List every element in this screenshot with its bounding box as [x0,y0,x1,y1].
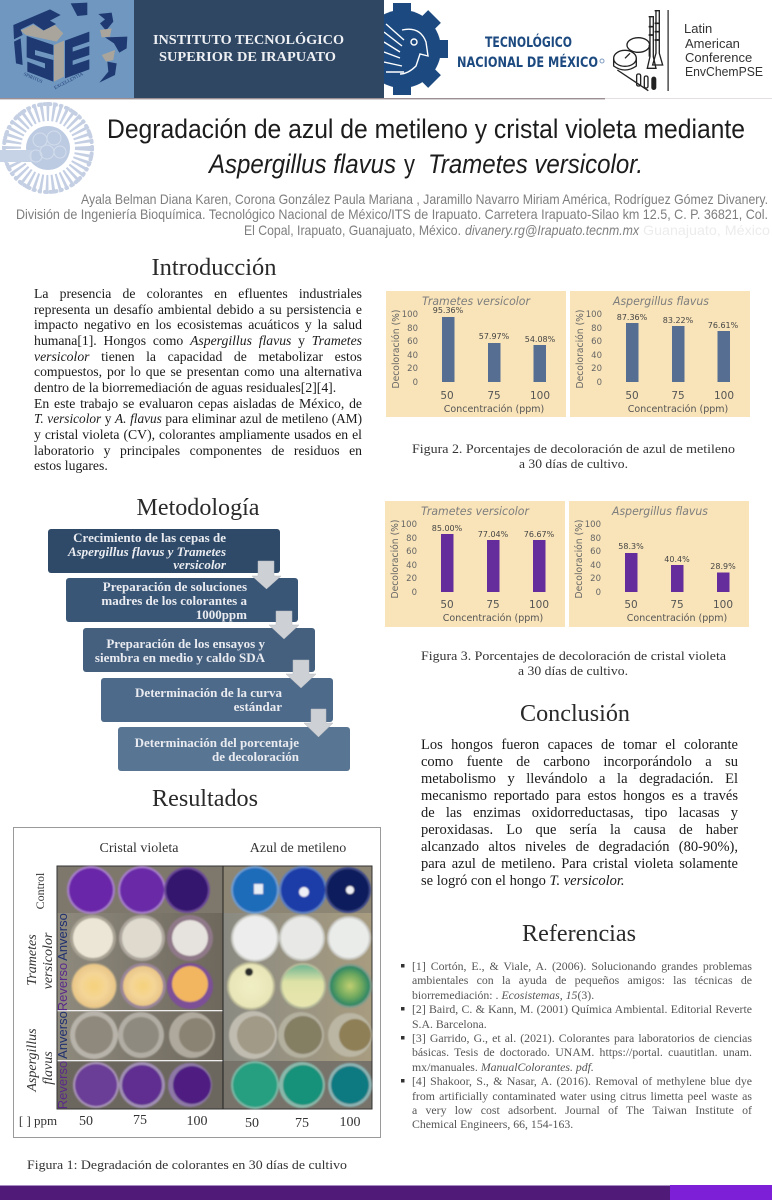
row labels: Aspergillus [25,1028,40,1093]
chart: methylene blue, Aspergillus flavus: 80 [591,324,602,334]
chart: methylene blue, Trametes versicolor: 57.97% [479,332,510,341]
step 4: Determinación de la curva [135,685,282,700]
icon: ISIE cube logo: SPIRITUS [23,72,43,85]
step 5 [118,727,350,771]
chart: methylene blue, Trametes versicolor: 54.08% [525,335,556,344]
chart: methylene blue, Trametes versicolor: 60 [407,337,418,347]
chart: crystal violet, Trametes versicolor: 85.00% [432,524,463,533]
step 3: siembra en medio y caldo SDA [95,650,266,665]
header: Tecnológico Nacional de México wordmark: TECNOLÓGICO [485,33,572,51]
step 1: Crecimiento de las cepas de [73,530,226,545]
header: institute name panel [134,0,384,98]
text block: introduction: estos lugares. [34,458,108,473]
chart: methylene blue, Trametes versicolor: Decoloración (%) [390,309,402,388]
step 3: Preparación de los ensayos y [106,636,265,651]
text block: references: Chemical Engineers, 66, 154-163. [412,1117,573,1131]
authors and affiliation: divanery.rg@Irapuato.tecnm.mx [465,222,640,238]
chart: crystal violet, Aspergillus flavus: Aspergillus flavus [611,504,708,518]
chart: methylene blue, Aspergillus flavus [570,291,750,417]
text block: conclusion [421,737,738,889]
chart: methylene blue, Trametes versicolor: 0 [413,378,418,388]
chart: methylene blue, Aspergillus flavus: 75 [671,390,685,402]
text block: introduction: representa un desafío ambiental debido a su persistencia e [34,302,362,317]
row: Trametes obverse plates [70,914,371,962]
chart: methylene blue, Aspergillus flavus: Aspergillus flavus [612,294,709,308]
row labels: flavus [41,1051,56,1085]
row labels: Anverso [55,913,70,961]
row labels: Reverso [55,963,70,1011]
concentration axis: 75 [133,1113,147,1128]
chart: methylene blue, Trametes versicolor: 80 [407,324,418,334]
step 4 [101,678,333,722]
caption: figure 3 [421,648,726,678]
header: conference name: Latin [684,21,712,36]
figure 1: culture plates photo: Azul de metileno [250,841,346,856]
text block: references: ambientales con la ayuda de pequeños amigos: las técnicas de [412,973,752,987]
concentration axis: 100 [186,1114,208,1129]
figure 1: culture plates photo: Cristal violeta [100,841,179,856]
chart: methylene blue, Aspergillus flavus: Decoloración (%) [574,309,586,388]
text block: conclusion: peroxidasas. Lo que sería la causa de haber [421,822,738,838]
caption: figure 1: Figura 1: Degradación de colorantes en 30 días de cultivo [27,1157,347,1172]
arrow 2 [269,611,299,639]
chart: crystal violet, Aspergillus flavus: 80 [590,534,601,544]
header: conference name [684,21,763,79]
text block: introduction: laboratorio y principales componentes de residuos en [34,443,362,458]
text block: conclusion: como fuente de carbono incorporándolo a su [421,754,738,770]
step 2: Preparación de soluciones [103,579,247,594]
title: Degradación de azul de metileno y cristal violeta mediante [107,114,745,144]
concentration axis: [ ] ppm [19,1113,57,1128]
header: conference name: American [685,36,740,51]
caption: figure 2 [412,441,735,471]
title: Aspergillus flavus [207,149,396,179]
row labels: Reverso [55,1061,70,1109]
heading: Conclusión: Conclusión [520,701,630,727]
chart: methylene blue, Trametes versicolor [386,291,566,417]
header rule [0,98,772,99]
text block: introduction: La presencia de colorantes en efluentes industriales [34,286,362,301]
row: control plates [67,866,371,914]
chart: crystal violet, Aspergillus flavus: 100 [585,520,601,530]
icon: ISIE cube logo: EXCELLENTIA [54,72,85,91]
header: Tecnológico Nacional de México wordmark [457,33,604,71]
chart: crystal violet, Trametes versicolor: 50 [440,599,454,611]
chart: crystal violet, Trametes versicolor: Concentración (ppm) [443,613,543,624]
chart: crystal violet, Trametes versicolor: 100 [401,520,417,530]
text block: introduction: humana[1]. Hongos como Aspergillus flavus y Trametes [34,333,362,348]
header: conference divider [668,10,669,91]
text block: introduction: En este trabajo se evaluaron cepas aisladas de México, de [34,396,362,411]
concentration axis: 50 [245,1116,259,1131]
chart: crystal violet, Trametes versicolor: Decoloración (%) [389,519,401,598]
row: Aspergillus obverse plates [70,1011,372,1059]
row labels: Control [33,872,47,909]
chart: methylene blue, Trametes versicolor: Concentración (ppm) [444,404,544,415]
step 4: estándar [234,699,282,714]
authors and affiliation: Guanajuato, México [643,222,770,238]
step 1: versicolor [173,557,227,572]
icon: fungal spore decoration [0,104,92,192]
chart: crystal violet, Aspergillus flavus: 40.4% [664,555,690,564]
chart: methylene blue, Aspergillus flavus: 100 [714,390,734,402]
row labels [25,872,70,1109]
header: conference name: EnvChemPSE [685,64,763,79]
step 2: 1000ppm [196,607,247,622]
arrow 4 [304,709,333,737]
caption: figure 3: a 30 días de cultivo. [518,663,628,678]
chart: methylene blue, Trametes versicolor: Trametes versicolor [422,294,531,308]
row: Trametes reverse plates [71,962,372,1010]
header: Tecnológico Nacional de México wordmark: NACIONAL DE MÉXICO [457,54,598,71]
text block: references: biorremediación: . Ecosistemas, 15(3). [412,988,594,1002]
chart: crystal violet, Aspergillus flavus: 50 [624,599,638,611]
concentration axis: 50 [79,1114,93,1129]
chart: crystal violet, Trametes versicolor: 80 [406,534,417,544]
chart: methylene blue, Trametes versicolor: 95.36% [433,306,464,315]
header: conference name: Conference [685,50,752,65]
text block: references: from artificially contaminated water using citrus limetta peel waste as [412,1089,752,1103]
step 5: Determinación del porcentaje [135,735,299,750]
chart: methylene blue, Trametes versicolor: 20 [407,364,418,374]
row labels: Trametes [25,934,40,986]
chart: crystal violet, Trametes versicolor: 77.04% [478,530,509,539]
text block: introduction: T. versicolor y A. flavus para eliminar azul de metileno (AM) [34,411,362,426]
chart: crystal violet, Trametes versicolor: 76.67% [524,530,555,539]
text block: references: a very low cost adsorbent. Journal of The Taiwan Institute of [412,1103,752,1117]
text block: conclusion: Los hongos fueron capaces de tomar el colorante [421,737,738,753]
chart: crystal violet, Aspergillus flavus: 100 [713,599,733,611]
concentration axis: 75 [295,1116,309,1131]
figure 1: culture plates photo [14,828,380,1138]
chart: methylene blue, Aspergillus flavus: 0 [597,378,602,388]
text block: introduction: y cristal violeta (CV), colorantes ampliamente usados en el [34,427,362,442]
step 5: de decoloración [212,749,300,764]
authors and affiliation [16,191,770,238]
chart: methylene blue, Aspergillus flavus: 76.61% [708,321,739,330]
heading: Resultados: Resultados [152,786,258,812]
header: institute name panel: SUPERIOR DE IRAPUATO [159,50,336,65]
step 3 [83,628,315,672]
text block: introduction [34,286,362,473]
chart: methylene blue, Trametes versicolor: 50 [440,390,454,402]
text block: references: [2] Baird, C. & Kann, M. (2001) Química Ambiental. Editorial Reverte [412,1002,752,1016]
caption: figure 2: a 30 días de cultivo. [519,456,628,471]
row labels: Anverso [55,1011,70,1059]
header: institute logo panel [0,0,134,98]
heading: Referencias: Referencias [522,921,636,947]
chart: crystal violet, Aspergillus flavus [569,501,749,627]
text block: conclusion: mecanismo reportado para estos hongos es a través [421,788,738,804]
chart: methylene blue, Aspergillus flavus: Concentración (ppm) [628,404,728,415]
text block: references: básicas. Tesis de doctorado. UNAM. https://portal. cuautitlan. unam. [412,1045,752,1059]
concentration axis [19,1113,360,1131]
chart: crystal violet, Aspergillus flavus: Decoloración (%) [573,519,585,598]
step 1: Aspergillus flavus y Trametes [67,544,226,559]
chart: crystal violet, Aspergillus flavus: 60 [590,547,601,557]
photo background [57,866,372,1109]
chart: methylene blue, Aspergillus flavus: 20 [591,364,602,374]
concentration axis: 100 [340,1115,360,1130]
chart: methylene blue, Aspergillus flavus: 100 [586,310,602,320]
authors and affiliation: El Copal, Irapuato, Guanajuato, México. [244,222,461,238]
step 2 [66,578,298,622]
text block: references: [1] Cortón, E., & Viale, A. (2006). Solucionando grandes problemas [412,959,752,973]
text block: introduction: dentro de la biorremediación de aguas residuales[2][4]. [34,380,336,395]
text block: references [412,959,752,1131]
chart: methylene blue, Aspergillus flavus: 87.36% [617,313,648,322]
reference bullets [401,964,404,1082]
row labels: versicolor [41,932,56,989]
arrow 3 [286,660,316,688]
chart: crystal violet, Aspergillus flavus: 40 [590,561,601,571]
icon: Tecnológico Nacional gear logo [384,3,448,95]
text block: references: [3] Garrido, G., et al. (2021). Colorantes para laboratorios de ciencias [412,1031,752,1045]
chart: methylene blue, Trametes versicolor: 75 [487,390,501,402]
chart: crystal violet, Trametes versicolor: 75 [486,599,500,611]
title: Trametes versicolor. [428,149,643,179]
chart: methylene blue, Aspergillus flavus: 60 [591,337,602,347]
caption: figure 2: Figura 2. Porcentajes de decoloración de azul de metileno [412,441,735,456]
text block: conclusion: de las enzimas oxidorreductasas, tipo lacasas y [421,805,738,821]
chart: methylene blue, Aspergillus flavus: 50 [625,390,639,402]
text block: conclusion: para azul de metileno. Para cristal violeta solamente [421,856,738,872]
step 2: madres de los colorantes a [101,593,247,608]
title: y [404,149,416,179]
chart: crystal violet, Aspergillus flavus: 28.9% [710,562,736,571]
chart: crystal violet, Trametes versicolor: Trametes versicolor [421,504,530,518]
text block: references: mx/manuales. ManualColorantes. pdf. [412,1060,594,1074]
chart: crystal violet, Trametes versicolor: 0 [412,588,417,598]
text block: references: S.A. Barcelona. [412,1017,487,1031]
chart: crystal violet, Trametes versicolor [385,501,565,627]
text block: introduction: versicolor tienen la capacidad de metabolizar estos [34,349,362,364]
chart: crystal violet, Aspergillus flavus: 0 [596,588,601,598]
footer band [0,1185,772,1200]
chart: methylene blue, Trametes versicolor: 40 [407,351,418,361]
chart: crystal violet, Trametes versicolor: 100 [529,599,549,611]
methodology flow [48,529,350,771]
arrow 1 [252,561,281,589]
chart: crystal violet, Aspergillus flavus: 20 [590,574,601,584]
text block: references: [4] Shakoor, S., & Nasar, A. (2016). Removal of methylene blue dye [412,1074,752,1088]
chart: methylene blue, Trametes versicolor: 100 [530,390,550,402]
title [107,114,745,179]
chart: crystal violet, Trametes versicolor: 60 [406,547,417,557]
chart: methylene blue, Aspergillus flavus: 83.22% [663,316,694,325]
heading: Introducción: Introducción [152,255,276,281]
chart: crystal violet, Aspergillus flavus: 58.3% [618,542,644,551]
header: institute name panel: INSTITUTO TECNOLÓGICO [153,31,344,48]
heading: Metodología: Metodología [136,495,260,521]
chart: crystal violet, Aspergillus flavus: 75 [670,599,684,611]
caption: figure 3: Figura 3. Porcentajes de decoloración de cristal violeta [421,648,726,663]
chart: crystal violet, Trametes versicolor: 20 [406,574,417,584]
icon: laboratory glassware [614,11,663,91]
chart: crystal violet, Aspergillus flavus: Concentración (ppm) [627,613,727,624]
text block: introduction: compuestos, por lo que se presentan como una alternativa [34,364,362,379]
icon: ISIE cube logo [13,3,127,91]
row: Aspergillus reverse plates [73,1061,372,1109]
step 1 [48,529,280,573]
text block: conclusion: alcanzado altos niveles de degradación (80-90%), [421,839,738,855]
text block: conclusion: metabolismo y llevándolo a la degradación. El [421,771,738,787]
chart: methylene blue, Aspergillus flavus: 40 [591,351,602,361]
chart: crystal violet, Trametes versicolor: 40 [406,561,417,571]
chart: methylene blue, Trametes versicolor: 100 [402,310,418,320]
text block: introduction: impacto negativo en los ecosistemas acuáticos y la salud [34,317,362,332]
text block: conclusion: se logró con el hongo T. versicolor. [421,873,625,889]
